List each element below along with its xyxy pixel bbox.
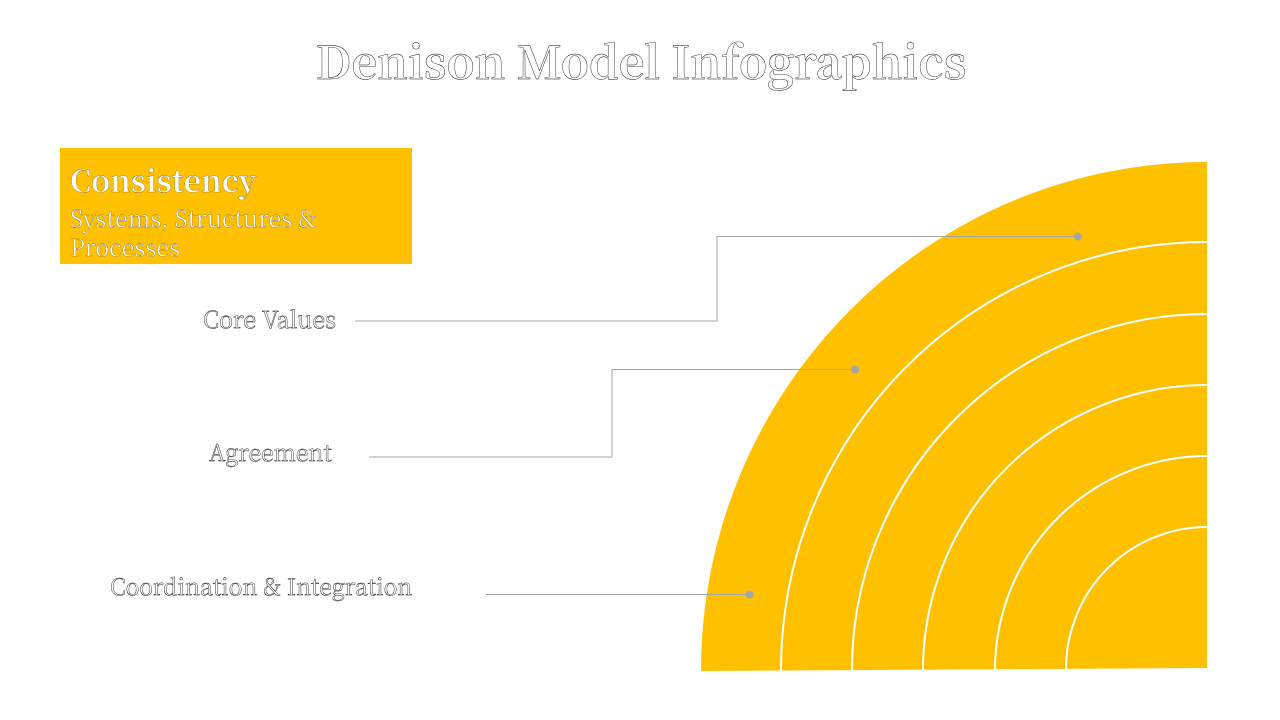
panel description [70,200,316,263]
panel: consistency [60,148,412,264]
panel description: Systems, Structures & [70,200,316,234]
ring dividers [781,242,1207,671]
label: agreement: Agreement [209,435,332,468]
title: Denison Model Infographics [316,27,966,92]
label: coordination: Coordination & Integration [110,569,412,602]
connector: coordination [486,590,754,598]
connector: core values [355,232,1082,321]
panel description: Processes [70,229,180,263]
connector: agreement [369,366,859,457]
panel heading: Consistency [70,157,256,201]
label: core values: Core Values [203,301,336,335]
outer quarter circle [701,162,1207,671]
